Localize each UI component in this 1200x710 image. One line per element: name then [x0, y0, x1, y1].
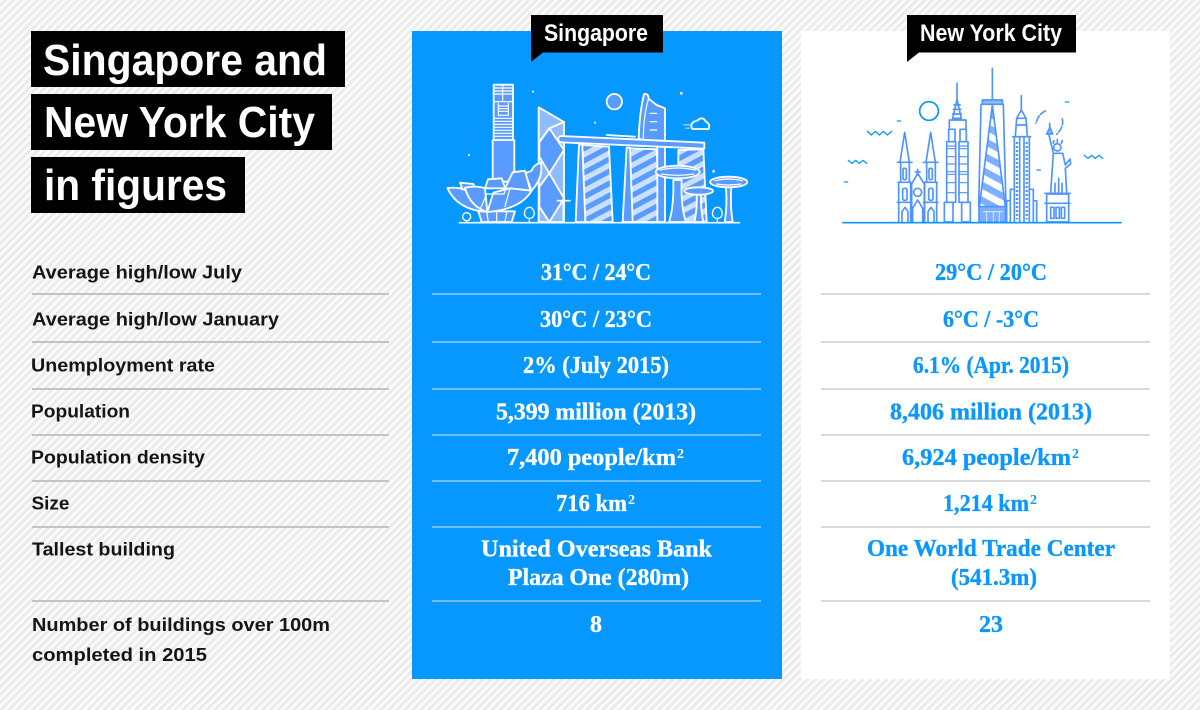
tag: Singapore: [531, 15, 663, 62]
label: unemployment rate: Unemployment rate: [31, 354, 215, 376]
value: density: 6,924 people/km: [902, 445, 1071, 471]
panel: Singapore: [412, 15, 782, 679]
label: average high/low January: Average high/low January: [32, 308, 280, 330]
icon: lattice tower: [539, 107, 564, 222]
icon: One World Trade Center: [979, 68, 1006, 222]
icon: Statue of Liberty: [1036, 111, 1071, 222]
label: population: Population: [31, 400, 130, 422]
value: size: 2: [628, 493, 635, 508]
value: January temperature: 6°C / -3°C: [943, 307, 1039, 333]
values: New York City: [821, 260, 1150, 638]
value: tallest building: United Overseas Bank: [481, 536, 713, 562]
icon: ArtScience lotus: [447, 163, 541, 222]
ground line: [459, 220, 739, 225]
icon: supertrees: [656, 166, 747, 222]
row labels: [31, 262, 389, 665]
label: number of buildings over 100m: Number of buildings over 100m: [32, 614, 330, 635]
value: tallest building: [867, 536, 1115, 591]
icon: cloud: [691, 118, 709, 129]
tag: New York City: [907, 15, 1076, 62]
label: number of buildings over 100m: [32, 614, 330, 665]
value: population: 5,399 million (2013): [496, 400, 696, 426]
icon: sky marks: [468, 91, 715, 173]
label: average high/low July: Average high/low July: [32, 262, 243, 282]
value: July temperature: 29°C / 20°C: [935, 260, 1047, 286]
value: tallest building: One World Trade Center: [867, 536, 1115, 562]
value: density: 2: [1072, 447, 1079, 462]
icon: sun: [920, 102, 938, 120]
label: tallest building: Tallest building: [32, 538, 175, 560]
label: size: Size: [32, 492, 70, 514]
icon: Chrysler Building: [1007, 96, 1037, 222]
value: tallest building: (541.3m): [951, 565, 1037, 591]
label: population density: Population density: [31, 446, 206, 468]
panel: New York City: [801, 15, 1170, 679]
value: size: 1,214 km: [943, 491, 1029, 517]
icon: cathedral: [897, 132, 938, 222]
value: size: 2: [1030, 493, 1037, 508]
value: tallest building: [481, 536, 713, 591]
icon: sun: [607, 94, 622, 109]
icon: small trees: [463, 200, 722, 223]
ground line: [842, 220, 1122, 225]
title: [31, 31, 345, 213]
tag: New York City: New York City: [920, 20, 1063, 47]
value: population: 8,406 million (2013): [890, 400, 1092, 426]
title line 1: Singapore and: [43, 36, 327, 85]
icon: sky marks: [844, 102, 1103, 182]
label: number of buildings over 100m: completed in 2015: [32, 644, 207, 665]
title line 3: in figures: [44, 161, 227, 210]
value: tallest building: Plaza One (280m): [508, 565, 689, 591]
value: buildings over 100m: 23: [979, 612, 1003, 638]
value: density: 2: [677, 447, 684, 462]
value: buildings over 100m: 8: [590, 612, 602, 638]
value: July temperature: 31°C / 24°C: [541, 260, 651, 286]
illustration: Singapore skyline: [447, 85, 747, 223]
tag: Singapore: Singapore: [544, 20, 648, 47]
value: size: 716 km: [556, 491, 627, 517]
value: unemployment: 2% (July 2015): [523, 353, 669, 379]
icon: tower: [493, 85, 514, 182]
value: density: 7,400 people/km: [507, 445, 676, 471]
icon: Empire State Building: [944, 83, 970, 222]
title line 2: New York City: [44, 98, 315, 147]
icon: Marina Bay Sands: [558, 94, 707, 222]
illustration: New York City skyline: [842, 68, 1122, 223]
values: Singapore: [432, 260, 761, 638]
value: unemployment: 6.1% (Apr. 2015): [913, 353, 1069, 379]
value: January temperature: 30°C / 23°C: [540, 307, 652, 333]
